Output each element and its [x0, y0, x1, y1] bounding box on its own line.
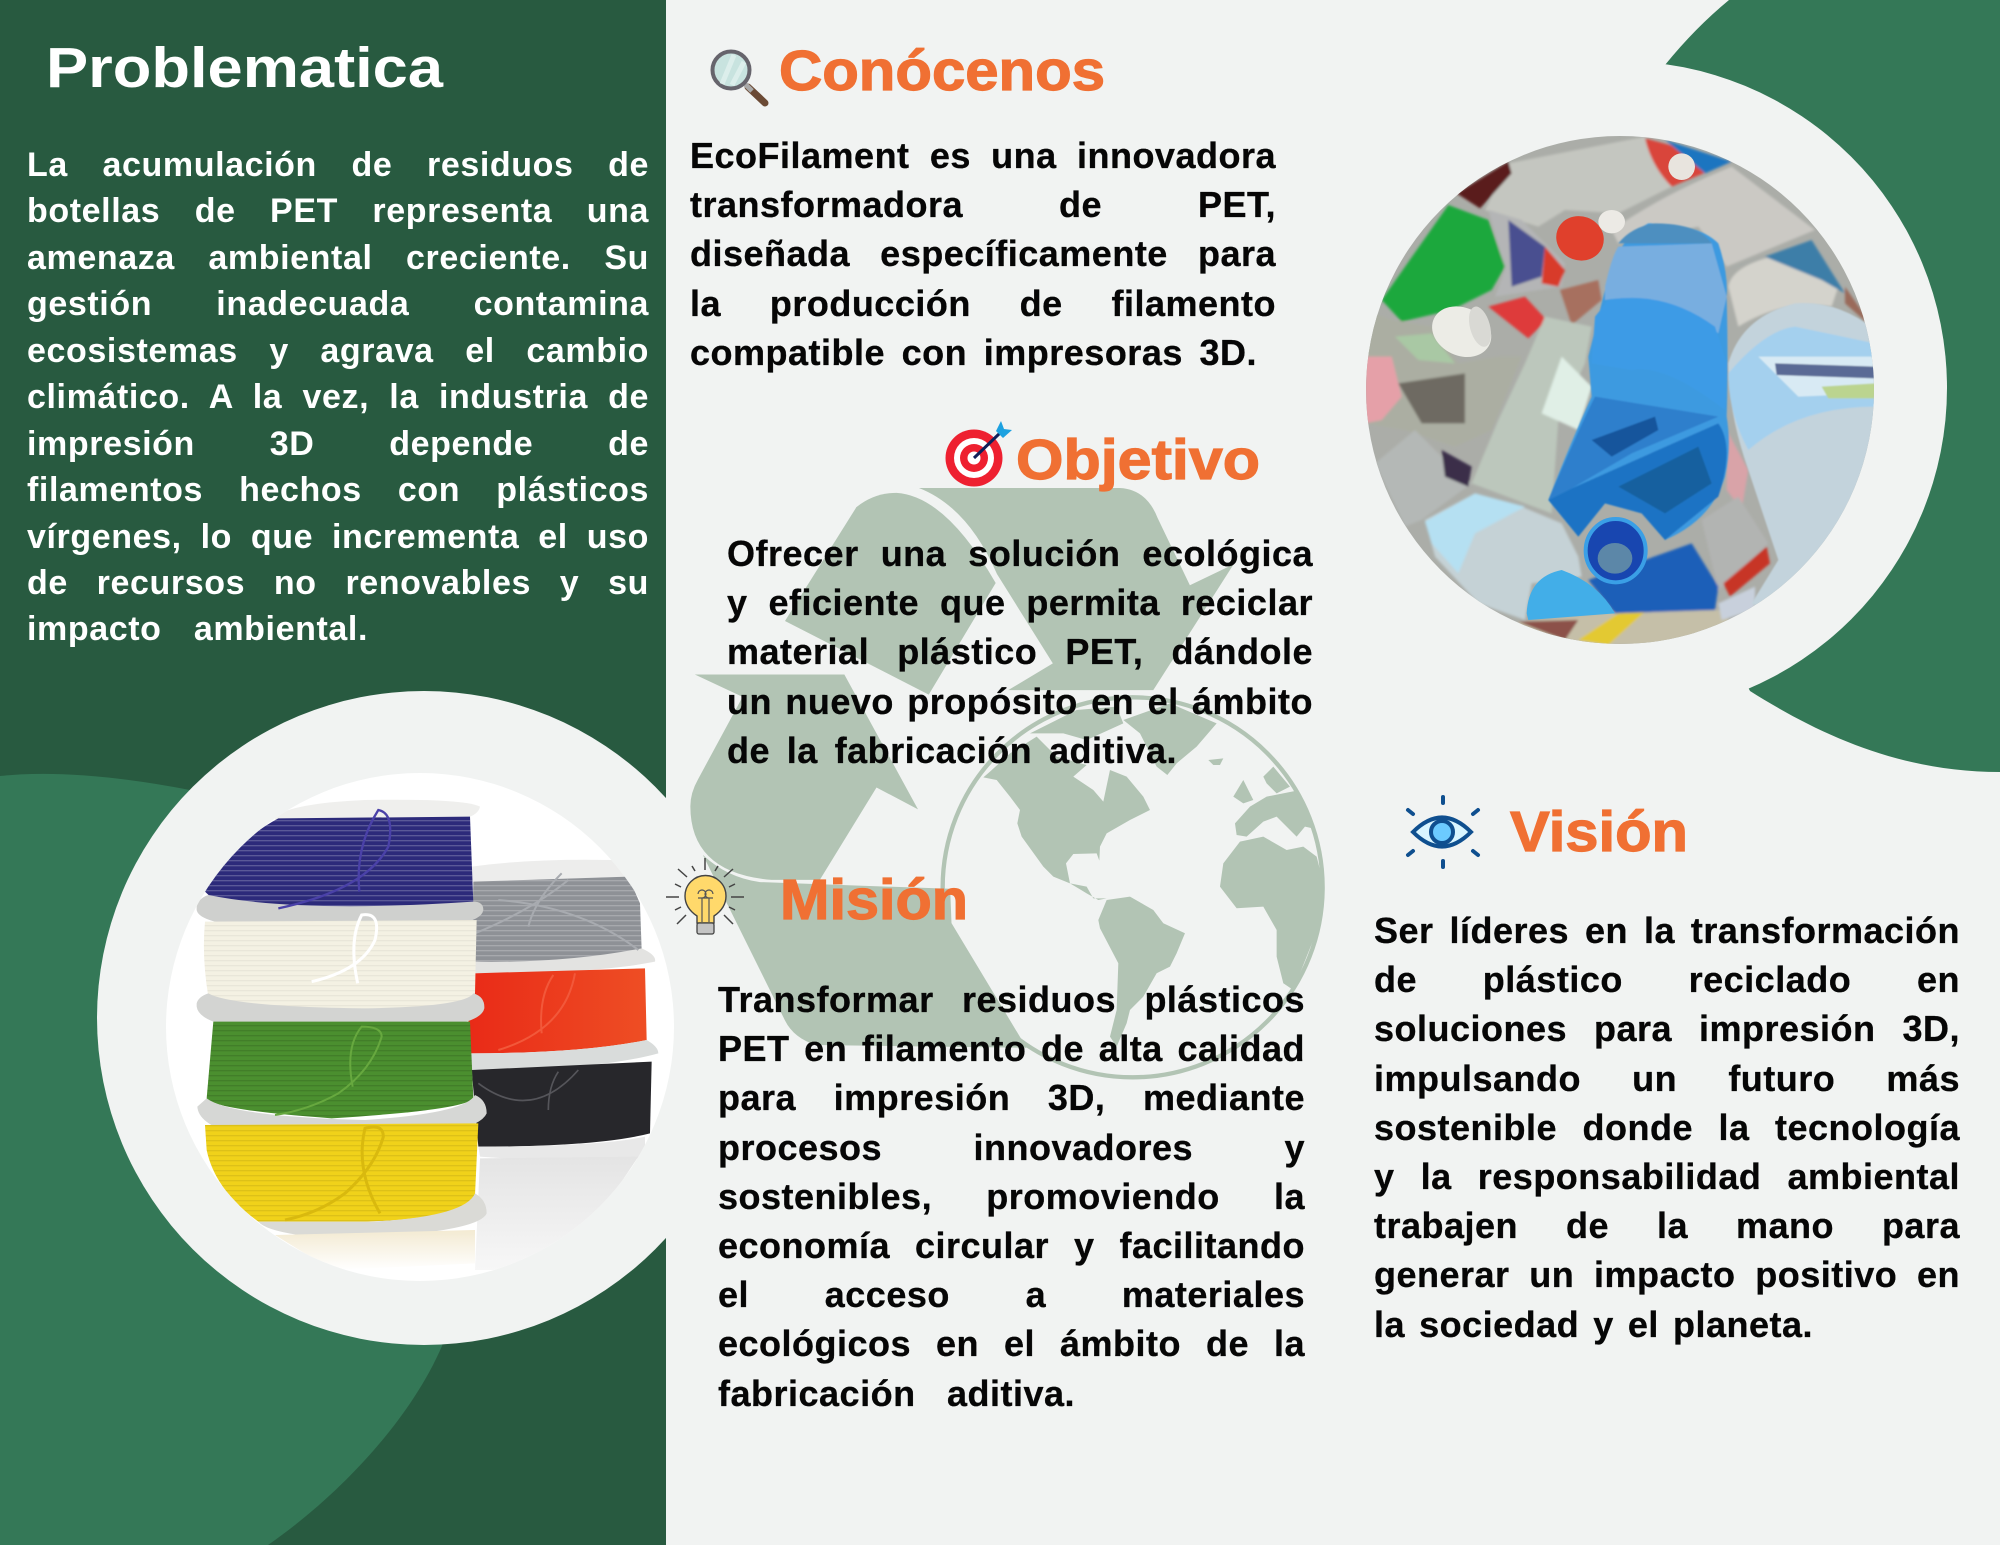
- text block: objetivo: un nuevo propósito en el ámbito: [727, 681, 1313, 722]
- text block: problematica: botellas de PET representa una: [27, 192, 649, 230]
- text block: mision: PET en filamento de alta calidad: [718, 1028, 1305, 1069]
- text block: problematica: vírgenes, lo que incrementa el uso: [27, 518, 649, 556]
- heading: mision: Misión: [780, 868, 968, 932]
- text block: mision: sostenibles, promoviendo la: [718, 1176, 1305, 1217]
- text block: problematica: de recursos no renovables y su: [27, 564, 649, 602]
- text block: conocenos: [690, 135, 1276, 373]
- text block: conocenos: EcoFilament es una innovadora: [690, 135, 1276, 176]
- text block: problematica: amenaza ambiental creciente. Su: [27, 239, 649, 277]
- text block: problematica: climático. A la vez, la industria de: [27, 378, 649, 416]
- blob: lower left: [0, 774, 468, 1545]
- text block: mision: economía circular y facilitando: [718, 1225, 1305, 1266]
- text block: vision: Ser líderes en la transformación: [1374, 910, 1960, 951]
- heading: conocenos: Conócenos: [779, 39, 1105, 103]
- text block: problematica: impresión 3D depende de: [27, 425, 649, 463]
- heading: problematica: Problematica: [46, 36, 444, 100]
- photo: filament spools: [160, 770, 680, 1290]
- left spool stack: [197, 800, 487, 1270]
- text block: problematica: filamentos hechos con plásticos: [27, 471, 649, 509]
- icon: light bulb: [666, 858, 744, 934]
- text block: vision: [1374, 910, 1960, 1345]
- text block: problematica: [27, 146, 649, 648]
- text block: vision: de plástico reciclado en: [1374, 959, 1960, 1000]
- text block: mision: fabricación aditiva.: [718, 1372, 1075, 1414]
- text block: objetivo: de la fabricación aditiva.: [727, 730, 1177, 771]
- text block: vision: impulsando un futuro más: [1374, 1058, 1960, 1099]
- text block: problematica: impacto ambiental.: [27, 610, 368, 648]
- text block: mision: Transformar residuos plásticos: [718, 979, 1305, 1020]
- heading: objetivo: Objetivo: [1016, 428, 1260, 492]
- text block: objetivo: Ofrecer una solución ecológica: [727, 533, 1313, 574]
- recycle arrow: bottom: [703, 855, 1026, 1048]
- text block: conocenos: la producción de filamento: [690, 283, 1276, 324]
- text block: conocenos: compatible con impresoras 3D.: [690, 332, 1257, 373]
- text block: vision: la sociedad y el planeta.: [1374, 1304, 1813, 1344]
- icon: target: [946, 421, 1012, 486]
- text block: mision: [718, 979, 1305, 1414]
- text block: vision: generar un impacto positivo en: [1374, 1254, 1960, 1295]
- text block: vision: soluciones para impresión 3D,: [1374, 1008, 1960, 1049]
- text block: problematica: La acumulación de residuos de: [27, 146, 649, 184]
- right bottle: [1728, 303, 1875, 610]
- text block: mision: ecológicos en el ámbito de la: [718, 1323, 1305, 1364]
- text block: problematica: gestión inadecuada contamina: [27, 285, 649, 323]
- photo: plastic bottles: [1365, 130, 1875, 650]
- text block: vision: y la responsabilidad ambiental: [1374, 1156, 1960, 1197]
- watermark: recycle symbol and globe: [690, 488, 1324, 1077]
- recycle arrows: upper and left: [690, 488, 1234, 880]
- ring: upper right: [1293, 61, 1947, 715]
- text block: mision: para impresión 3D, mediante: [718, 1077, 1305, 1118]
- text block: objetivo: [727, 533, 1313, 771]
- bottle neck: [1586, 519, 1646, 582]
- text block: problematica: ecosistemas y agrava el cambio: [27, 332, 649, 370]
- caps: [1556, 216, 1604, 261]
- globe: [943, 697, 1324, 1077]
- text block: vision: trabajen de la mano para: [1374, 1205, 1960, 1246]
- text block: conocenos: diseñada específicamente para: [690, 233, 1276, 274]
- text block: objetivo: y eficiente que permita reciclar: [727, 582, 1313, 623]
- blob: upper right: [1600, 0, 2000, 772]
- text block: conocenos: transformadora de PET,: [690, 184, 1276, 225]
- heading: vision: Visión: [1510, 800, 1688, 864]
- text block: vision: sostenible donde la tecnología: [1374, 1107, 1960, 1148]
- right spool stack: [467, 860, 658, 1270]
- icon: eye: [1408, 797, 1478, 867]
- text block: mision: procesos innovadores y: [718, 1127, 1305, 1168]
- blue bottle: [1548, 223, 1729, 540]
- panel: problematica background: [0, 0, 666, 1545]
- text block: mision: el acceso a materiales: [718, 1274, 1305, 1315]
- text block: objetivo: material plástico PET, dándole: [727, 631, 1313, 672]
- icon: magnifying glass: [712, 52, 765, 103]
- ring: lower left: [97, 691, 751, 1345]
